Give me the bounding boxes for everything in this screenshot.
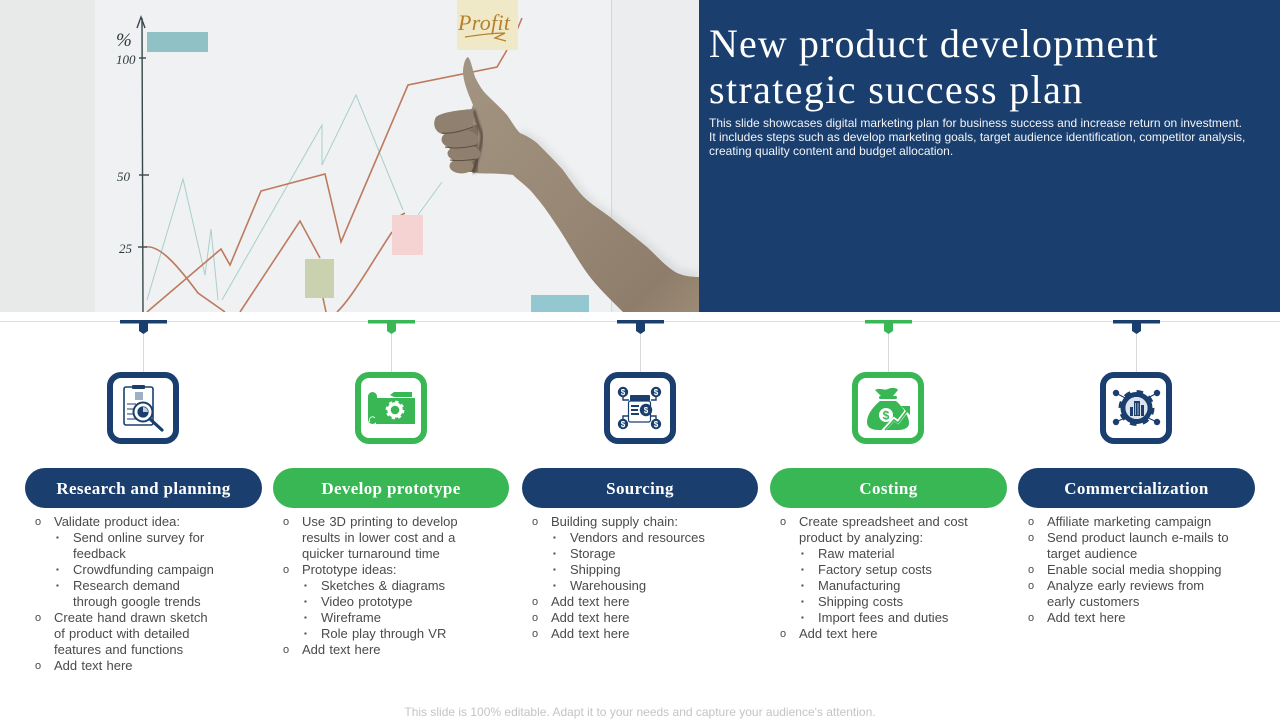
text block: Commercialization: early customers — [1047, 594, 1139, 609]
connector stem 4 — [888, 334, 889, 372]
text block: Develop prototype: o — [283, 644, 289, 656]
sticky notes — [147, 0, 589, 312]
text block: Develop prototype: Use 3D printing to develop — [302, 514, 458, 529]
marker 2 — [368, 320, 415, 334]
icon: supply network with dollar coins: $ — [621, 388, 626, 397]
text block: Costing: product by analyzing: — [799, 530, 923, 545]
text block: Research and planning: Validate product idea: — [54, 514, 180, 529]
marker 3 — [617, 320, 664, 334]
heading: Research and planning: Research and planning — [56, 479, 231, 498]
text block: Costing: ▪ — [801, 549, 804, 558]
text block: Costing: Create spreadsheet and cost — [799, 514, 968, 529]
heading: Costing — [770, 468, 1007, 508]
icon: supply network with dollar coins — [604, 372, 676, 444]
text block: Develop prototype: ▪ — [304, 613, 307, 622]
text block: Research and planning: features and functions — [54, 642, 183, 657]
text block: Research and planning: Send online survey for — [73, 530, 204, 545]
description: It includes steps such as develop marketing goals, target audience identification, competitor analysis, — [709, 130, 1245, 144]
text block: Costing: o — [780, 516, 786, 528]
text block: Develop prototype: ▪ — [304, 629, 307, 638]
icon: blueprint with gear — [355, 372, 427, 444]
text block: Sourcing: Add text here — [551, 594, 630, 609]
heading: Sourcing — [522, 468, 758, 508]
text block: Sourcing: o — [532, 612, 538, 624]
text block: Commercialization — [1028, 514, 1229, 625]
text block: Costing: Import fees and duties — [818, 610, 948, 625]
marker 5 — [1113, 320, 1160, 334]
text block: Commercialization: o — [1028, 580, 1034, 592]
icon: money bag with rising arrow — [852, 372, 924, 444]
heading: Commercialization: Commercialization — [1064, 479, 1209, 498]
text block: Sourcing — [532, 514, 705, 641]
connector stem 5 — [1136, 334, 1137, 372]
text block: Research and planning: o — [35, 516, 41, 528]
text block: Research and planning: o — [35, 612, 41, 624]
text block: Develop prototype: Video prototype — [321, 594, 412, 609]
text block: Costing: ▪ — [801, 565, 804, 574]
text block: Costing — [780, 514, 968, 641]
text block: Commercialization: o — [1028, 564, 1034, 576]
text block: Sourcing: Building supply chain: — [551, 514, 678, 529]
text block: Commercialization: target audience — [1047, 546, 1137, 561]
text block: Research and planning: Add text here — [54, 658, 133, 673]
text block: Costing: Manufacturing — [818, 578, 900, 593]
icon: supply network with dollar coins: $ — [654, 388, 659, 397]
text block: Sourcing: ▪ — [553, 549, 556, 558]
text block: Costing: Shipping costs — [818, 594, 903, 609]
text block: Sourcing: o — [532, 628, 538, 640]
text block: Sourcing: ▪ — [553, 533, 556, 542]
text block: Sourcing: ▪ — [553, 581, 556, 590]
text block: Research and planning: through google trends — [73, 594, 201, 609]
text block: Research and planning: ▪ — [56, 565, 59, 574]
text block: Sourcing: o — [532, 516, 538, 528]
title — [709, 21, 1159, 112]
timeline rule — [0, 321, 1280, 322]
text block: Research and planning: feedback — [73, 546, 126, 561]
text block: Commercialization: o — [1028, 532, 1034, 544]
text block: Develop prototype: results in lower cost and a — [302, 530, 455, 545]
text block: Research and planning: Create hand drawn sketch — [54, 610, 208, 625]
text block: Research and planning: of product with detailed — [54, 626, 190, 641]
text block: Develop prototype: quicker turnaround time — [302, 546, 440, 561]
text block: Develop prototype: Prototype ideas: — [302, 562, 397, 577]
text block: Commercialization: Analyze early reviews from — [1047, 578, 1204, 593]
connector stem 3 — [640, 334, 641, 372]
chart axis labels — [116, 30, 136, 256]
text block: Research and planning: ▪ — [56, 533, 59, 542]
text block: Develop prototype: Wireframe — [321, 610, 381, 625]
text block: Commercialization: o — [1028, 516, 1034, 528]
text block: Sourcing: o — [532, 596, 538, 608]
text block: Research and planning: o — [35, 660, 41, 672]
heading: Commercialization — [1018, 468, 1255, 508]
icon: supply network with dollar coins: $ — [654, 420, 659, 429]
text block: Research and planning: Crowdfunding campaign — [73, 562, 214, 577]
text block: Develop prototype: Role play through VR — [321, 626, 446, 641]
text block: Costing: Raw material — [818, 546, 894, 561]
text block: Sourcing: Warehousing — [570, 578, 646, 593]
description — [709, 116, 1245, 158]
photo: thumbs-up in front of profit chart — [0, 0, 699, 312]
heading: Develop prototype — [273, 468, 509, 508]
text block: Costing: ▪ — [801, 581, 804, 590]
description: This slide showcases digital marketing plan for business success and increase return on investment. — [709, 116, 1242, 130]
text block: Develop prototype — [283, 514, 458, 657]
title: strategic success plan — [709, 67, 1084, 112]
marker 1 — [120, 320, 167, 334]
text block: Costing: o — [780, 628, 786, 640]
chart axis labels: % — [116, 30, 132, 51]
chart axis labels: 50 — [117, 169, 130, 184]
text block: Sourcing: Add text here — [551, 610, 630, 625]
chart axis labels: 100 — [116, 52, 136, 67]
text block: Commercialization: Enable social media shopping — [1047, 562, 1222, 577]
text block: Sourcing: Add text here — [551, 626, 630, 641]
icon: supply network with dollar coins: $ — [621, 420, 626, 429]
text block: Develop prototype: o — [283, 516, 289, 528]
heading: Research and planning — [25, 468, 262, 508]
text block: Research and planning: Research demand — [73, 578, 180, 593]
text block: Research and planning: ▪ — [56, 581, 59, 590]
text block: Sourcing: Shipping — [570, 562, 621, 577]
text block: Costing: Factory setup costs — [818, 562, 932, 577]
footer note: This slide is 100% editable. Adapt it to your needs and capture your audience's attention. — [404, 705, 876, 719]
sticky note text: Profit: Profit — [457, 10, 511, 35]
header panel — [699, 0, 1280, 312]
arm and thumb — [434, 57, 699, 312]
icon: supply network with dollar coins: $ — [644, 406, 649, 415]
icon: money bag with rising arrow: $ — [883, 408, 890, 422]
connector stem 2 — [391, 334, 392, 372]
text block: Commercialization: Send product launch e-mails to — [1047, 530, 1229, 545]
marker 4 — [865, 320, 912, 334]
description: creating quality content and budget allocation. — [709, 144, 953, 158]
text block: Commercialization: o — [1028, 612, 1034, 624]
text block: Sourcing: Vendors and resources — [570, 530, 705, 545]
heading: Develop prototype: Develop prototype — [321, 479, 461, 498]
text block: Commercialization: Affiliate marketing campaign — [1047, 514, 1211, 529]
text block: Sourcing: ▪ — [553, 565, 556, 574]
text block: Develop prototype: Add text here — [302, 642, 381, 657]
text block: Commercialization: Add text here — [1047, 610, 1126, 625]
text block: Develop prototype: Sketches & diagrams — [321, 578, 445, 593]
text block: Develop prototype: ▪ — [304, 581, 307, 590]
title: New product development — [709, 21, 1159, 66]
icon: gear with city and nodes — [1100, 372, 1172, 444]
text block: Costing: ▪ — [801, 613, 804, 622]
text block: Costing: ▪ — [801, 597, 804, 606]
text block: Costing: Add text here — [799, 626, 878, 641]
heading: Costing: Costing — [859, 479, 918, 498]
text block: Develop prototype: o — [283, 564, 289, 576]
heading: Sourcing: Sourcing — [606, 479, 674, 498]
text block: Sourcing: Storage — [570, 546, 616, 561]
connector stem 1 — [143, 334, 144, 372]
text block: Research and planning — [35, 514, 214, 673]
chart axis labels: 25 — [119, 241, 132, 256]
icon: clipboard with magnifier — [107, 372, 179, 444]
text block: Develop prototype: ▪ — [304, 597, 307, 606]
